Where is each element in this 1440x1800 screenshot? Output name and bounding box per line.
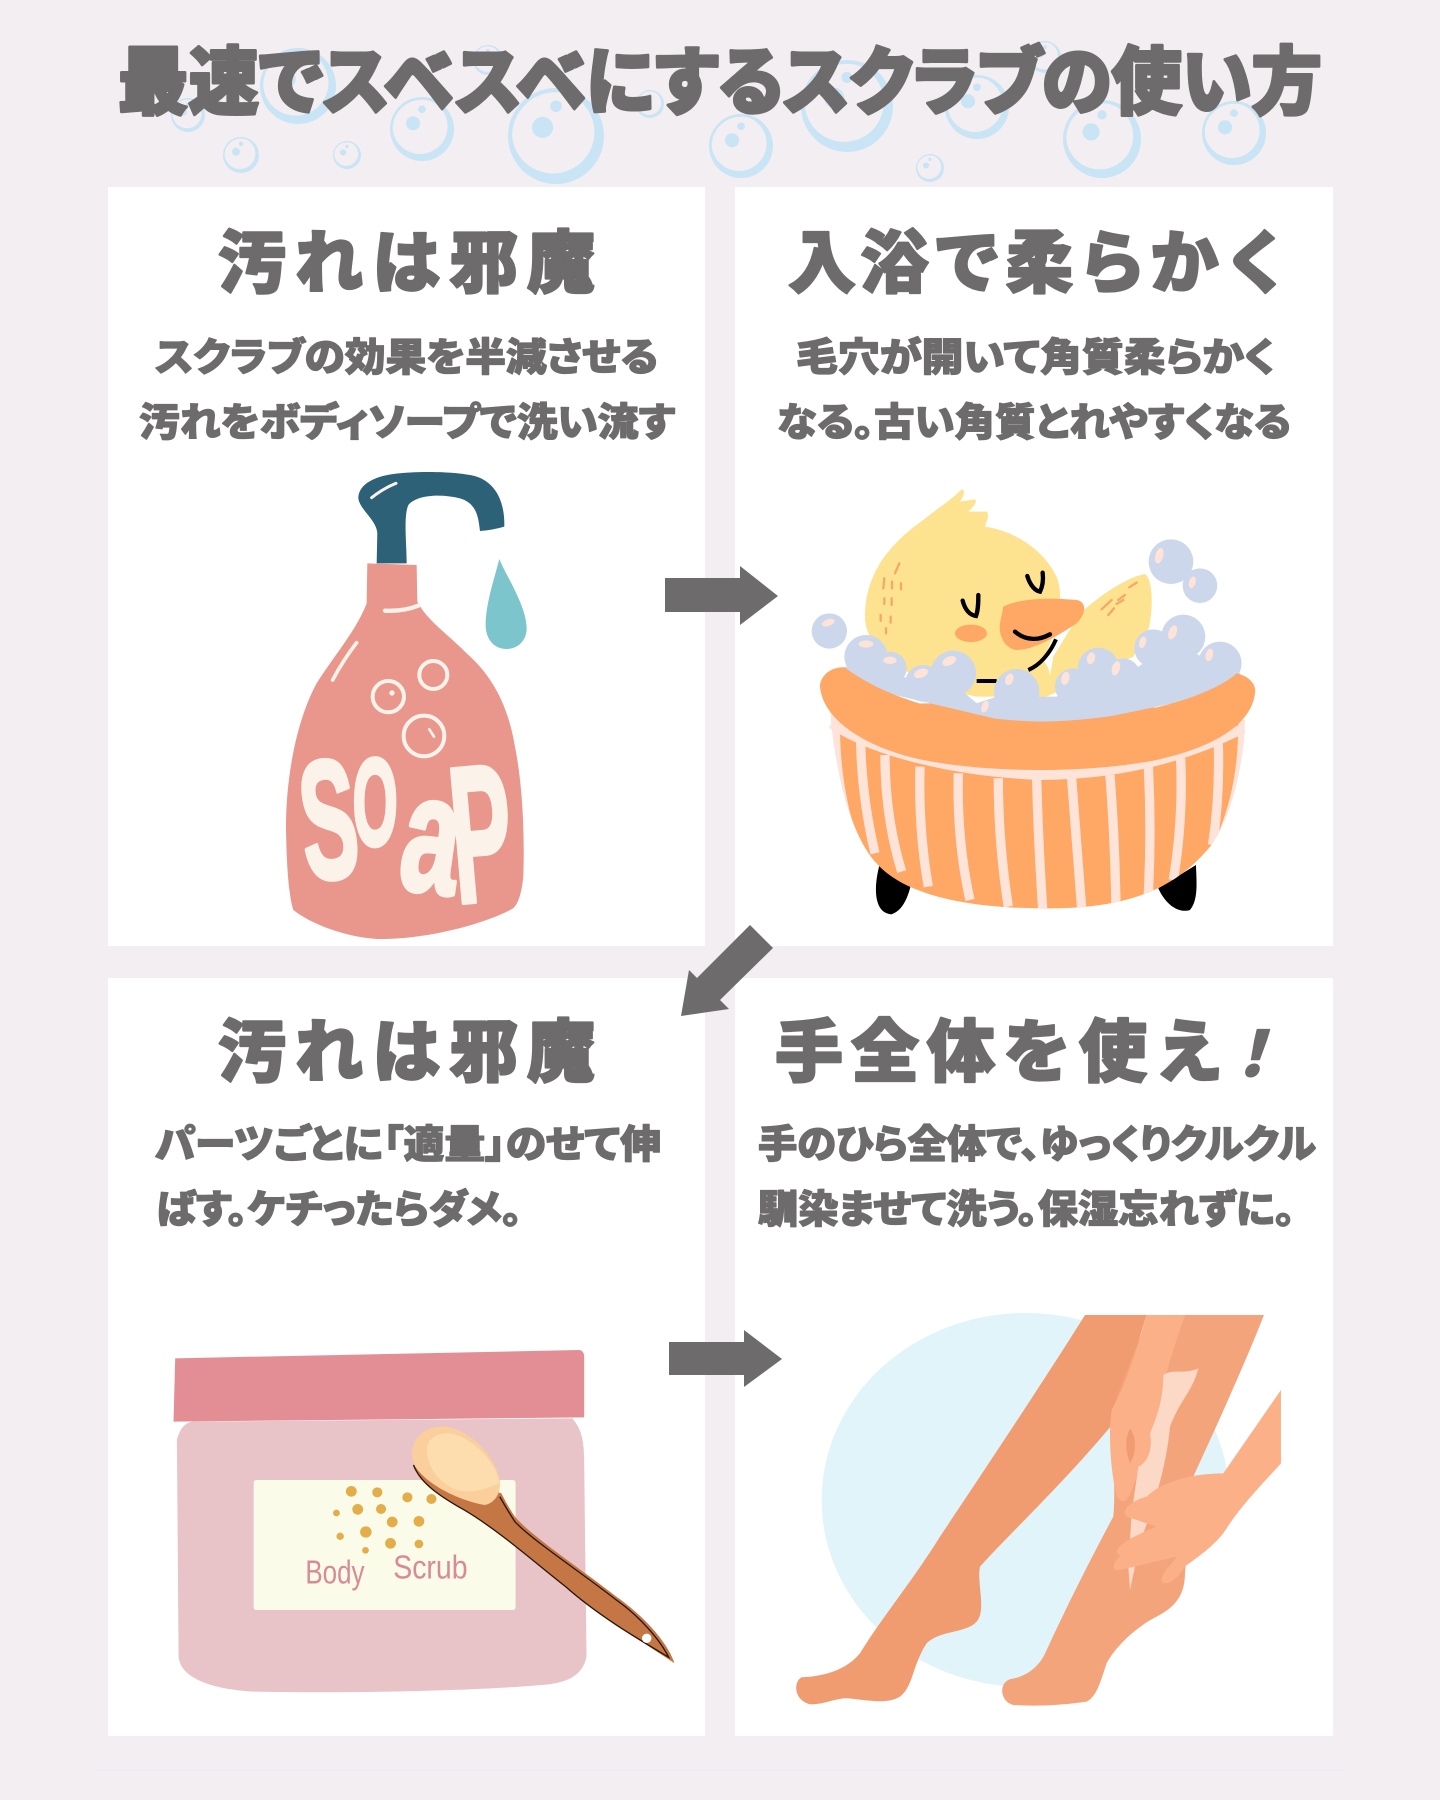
text: step 4 body — [758, 1124, 1316, 1232]
icon: body scrub jar with spoon: Scrub — [393, 1550, 468, 1586]
bottom line — [92, 1769, 1348, 1771]
icon: soap bottle: S — [291, 724, 367, 917]
panel: step 1 wash off dirt — [108, 187, 705, 946]
icon: body scrub jar with spoon: Body — [305, 1555, 365, 1591]
text: step 1 body — [139, 336, 675, 445]
panel: step 4 use whole hand — [735, 978, 1333, 1736]
text: step 2 body: なる。古い角質とれやすくなる — [777, 402, 1291, 445]
heading: step 4: ！ — [1216, 1021, 1297, 1090]
background bubbles — [171, 41, 1266, 184]
icon: legs with hands applying scrub — [796, 1313, 1281, 1720]
arrow: step 3 to step 4 — [669, 1330, 782, 1387]
panel: step 3 apply generously — [108, 978, 705, 1736]
title: 最速でスベスベにするスクラブの使い方 — [118, 41, 1322, 124]
icon: soap bottle: P — [441, 725, 521, 945]
icon: body scrub jar with spoon — [174, 1350, 674, 1692]
text: step 3 body — [155, 1123, 661, 1232]
text: step 3 body: ばす。ケチったらダメ。 — [156, 1188, 522, 1232]
icon: soap bottle: O — [353, 735, 398, 872]
text: step 4 body: 馴染ませて洗う。保湿忘れずに。 — [758, 1189, 1295, 1232]
text: step 4 body: 手のひら全体で、ゆっくりクルクル — [758, 1124, 1316, 1167]
text: step 1 body: 汚れをボディソープで洗い流す — [139, 401, 675, 445]
text: step 2 body: 毛穴が開いて角質柔らかく — [796, 336, 1275, 380]
panel: step 2 soften in bath — [735, 187, 1333, 946]
heading: step 4: 手全体を使え — [775, 1015, 1223, 1091]
icon: soap bottle: a — [391, 739, 474, 931]
heading: step 2: 入浴で柔らかく — [788, 226, 1291, 302]
arrow: step 2 to step 3 — [681, 925, 773, 1016]
text: step 1 body: スクラブの効果を半減させる — [155, 336, 658, 380]
icon: soap bottle — [286, 472, 527, 945]
text: step 2 body — [777, 336, 1291, 445]
heading: step 3: 汚れは邪魔 — [218, 1015, 595, 1091]
heading: step 1: 汚れは邪魔 — [218, 226, 595, 302]
icon: duck in bathtub — [812, 489, 1255, 937]
text: step 3 body: パーツごとに「適量」のせて伸 — [155, 1123, 661, 1167]
arrow: step 1 to step 2 — [665, 566, 778, 625]
